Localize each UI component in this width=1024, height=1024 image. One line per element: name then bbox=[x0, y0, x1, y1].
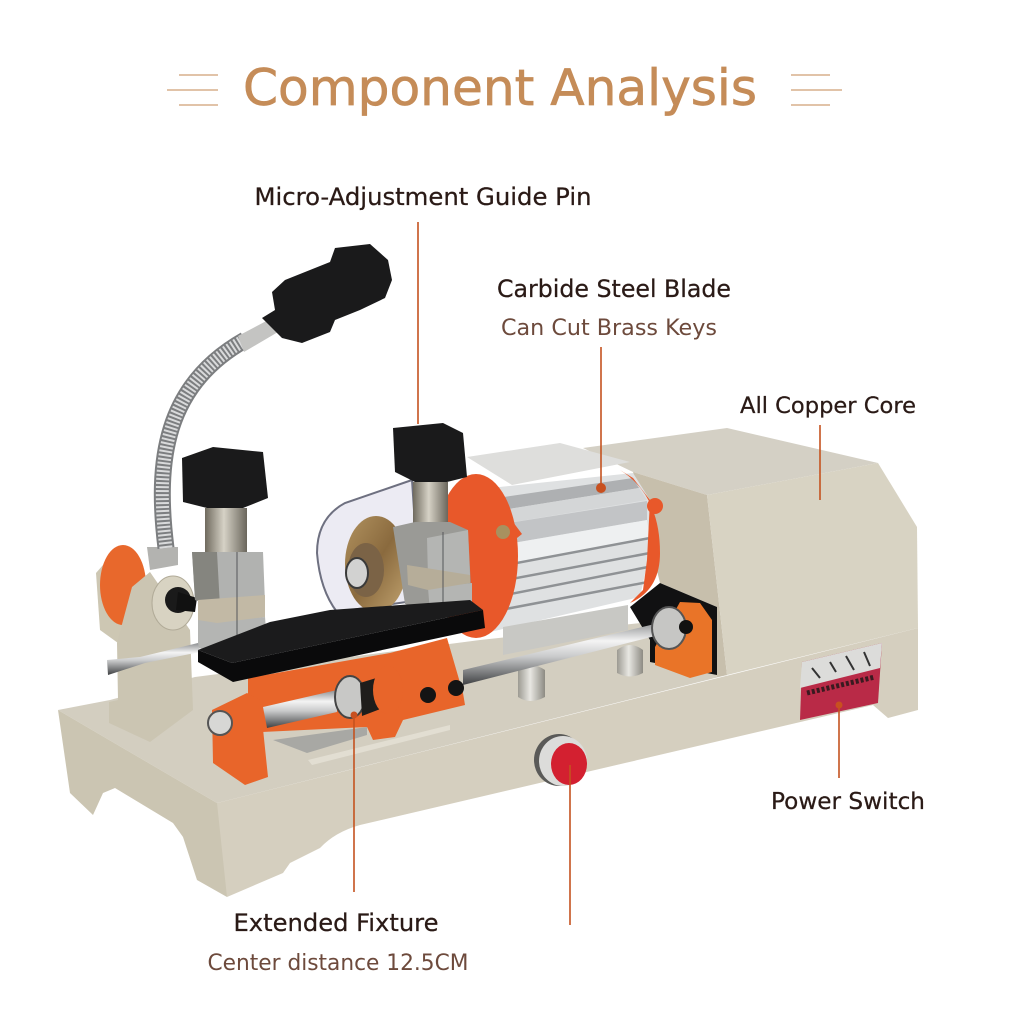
title: Component Analysis: Component Analysis bbox=[243, 59, 757, 117]
left clamp with knob bbox=[182, 447, 268, 652]
left vertical bracket bbox=[96, 545, 197, 742]
callout: All Copper Core: All Copper Core bbox=[740, 394, 916, 419]
callout: Power Switch: Power Switch bbox=[771, 789, 925, 815]
callout: Extended Fixture: Center distance 12.5CM bbox=[208, 951, 468, 976]
black motor mount behind right support bbox=[630, 583, 717, 675]
callout: Power Switch bbox=[771, 702, 925, 815]
leader line: power button bbox=[569, 765, 571, 925]
black work plate bbox=[198, 600, 485, 682]
callout: Micro-Adjustment Guide Pin: Micro-Adjustment Guide Pin bbox=[254, 183, 592, 211]
right clamp with knob bbox=[393, 423, 472, 612]
callout: Carbide Steel Blade bbox=[497, 275, 731, 493]
machine base bbox=[58, 622, 918, 897]
gray housing box bbox=[583, 428, 918, 677]
callout: Extended Fixture bbox=[208, 712, 468, 976]
callout: Carbide Steel Blade: Can Cut Brass Keys bbox=[501, 316, 717, 341]
extended fixture bbox=[208, 666, 403, 785]
carbide blade bbox=[345, 516, 407, 612]
gooseneck lamp bbox=[162, 244, 392, 548]
motor bbox=[434, 443, 663, 655]
warning label plate bbox=[800, 643, 882, 720]
blade guard bbox=[317, 480, 420, 612]
guide rod and right orange support bbox=[463, 602, 712, 685]
orange carriage bbox=[248, 638, 465, 740]
callout: Extended Fixture: Extended Fixture bbox=[234, 909, 438, 937]
power button bbox=[534, 734, 587, 786]
callout: Carbide Steel Blade: Carbide Steel Blade bbox=[497, 275, 731, 303]
motor feet bbox=[518, 645, 643, 701]
silver base plate under fixture bbox=[273, 725, 450, 765]
guide key pin bbox=[107, 643, 200, 675]
